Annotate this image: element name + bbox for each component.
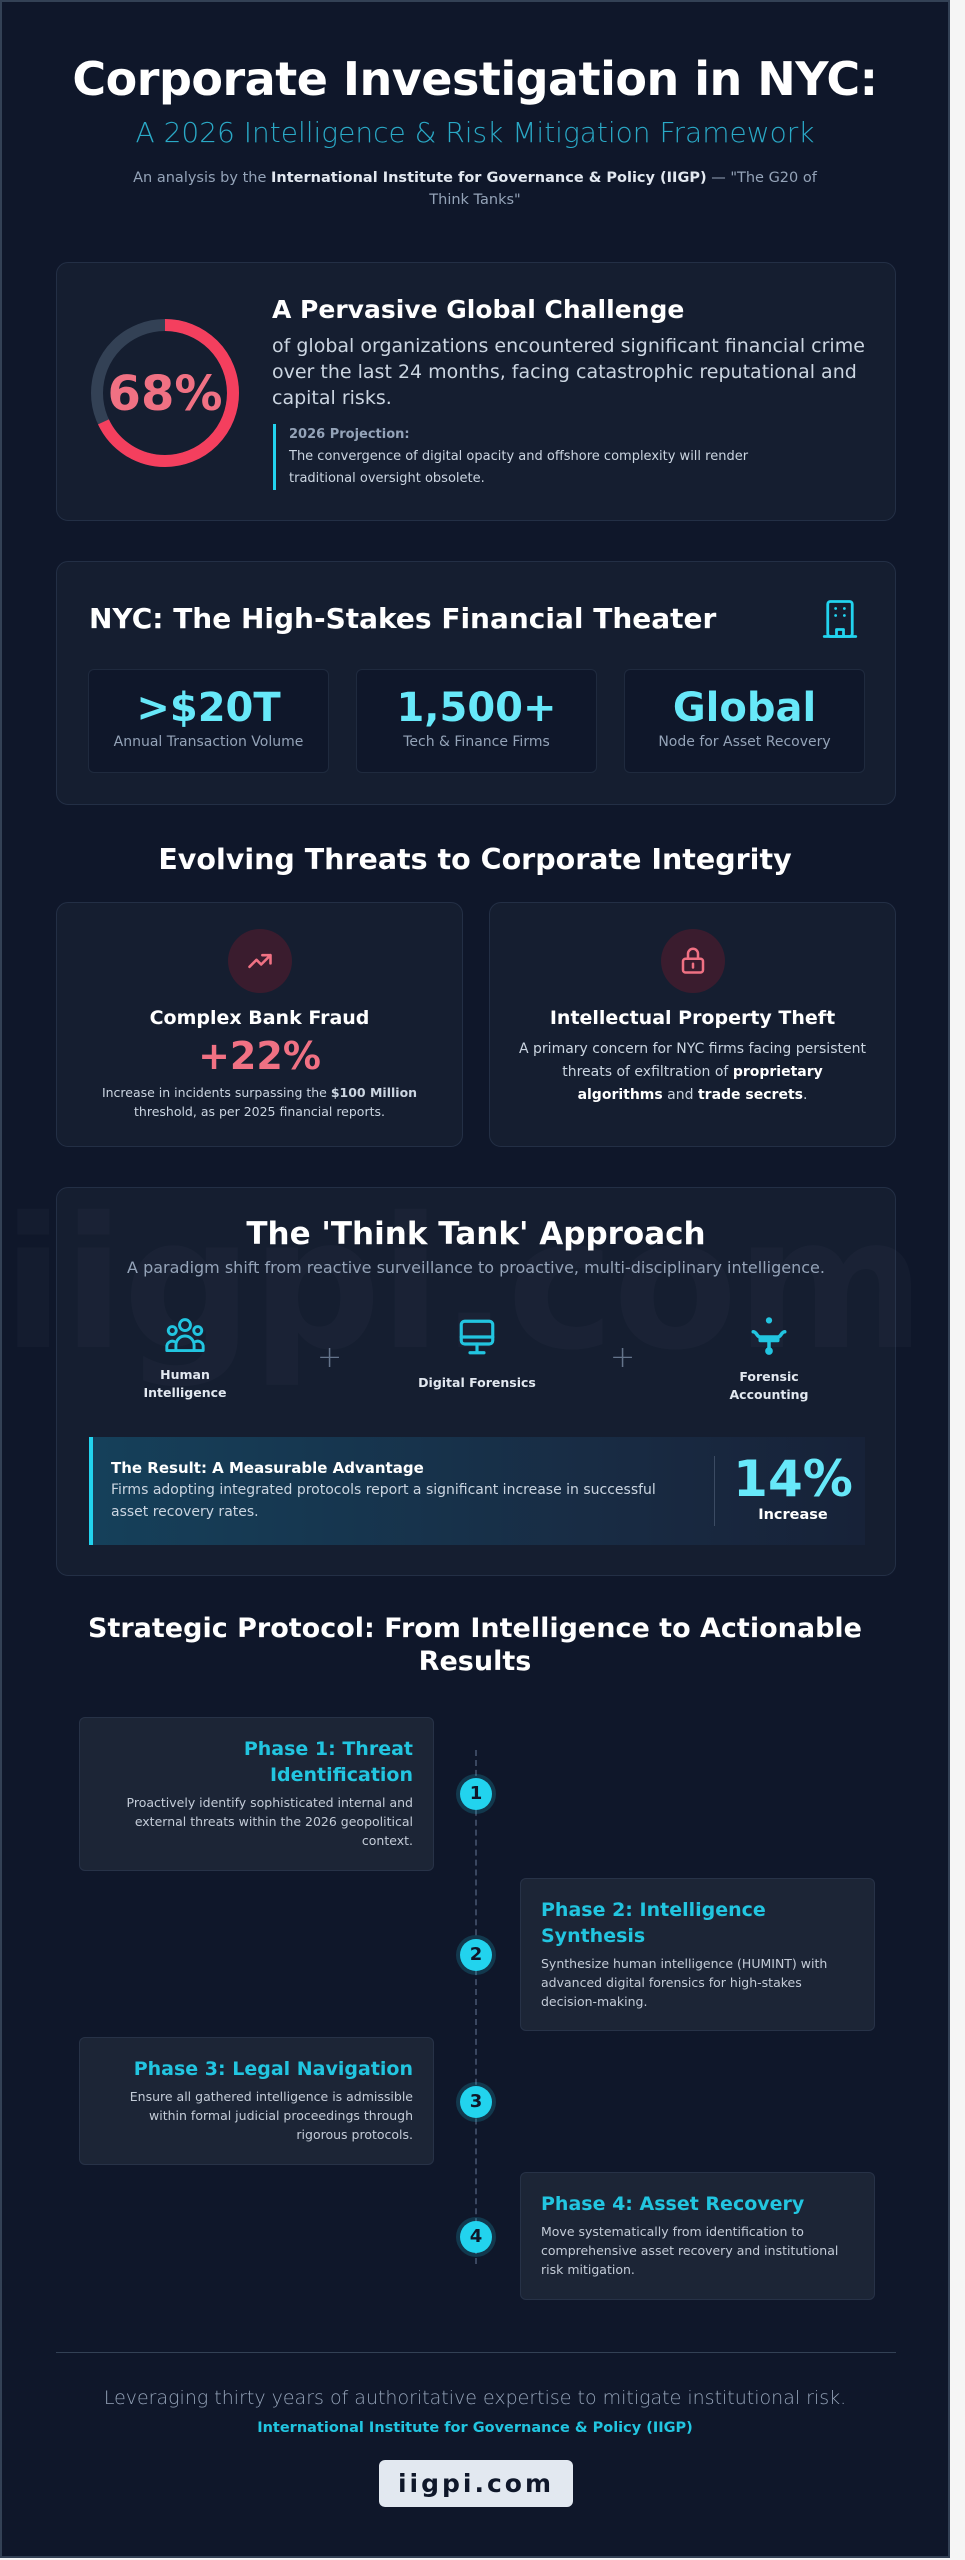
panel: NYC financial theater: [56, 561, 896, 805]
heading: The 'Think Tank' Approach: [246, 1216, 706, 1252]
projection: [273, 424, 803, 490]
button: iigpi.com: [379, 2460, 573, 2507]
stat: transaction: >$20T: [136, 685, 281, 731]
callout: result: Firms adopting integrated protocols report a significant increase in successful asset recovery rates.: [111, 1482, 656, 1520]
subtitle: A paradigm shift from reactive surveillance to proactive, multi-disciplinary intelligence.: [127, 1258, 825, 1277]
stat: global: Node for Asset Recovery: [658, 734, 831, 750]
stat 14%: 14%: [733, 1450, 853, 1508]
pillar: digital forensics: [418, 1320, 536, 1390]
pillar: human intelligence: Intelligence: [143, 1385, 227, 1400]
donut chart 68%: [91, 319, 239, 467]
pillar: human intelligence: [143, 1318, 227, 1400]
description: A primary concern for NYC firms facing persistent threats of exfiltration of proprietary: [519, 1041, 866, 1080]
phase 4: Move systematically from identification to comprehensive asset recovery and institutional risk mitigation.: [541, 2224, 838, 2277]
icon: lock: [661, 929, 725, 993]
stat: firms: [356, 669, 597, 773]
phase 4: Phase 4: Asset Recovery: [541, 2193, 804, 2215]
title: Corporate Investigation in NYC:: [72, 52, 878, 106]
marker 4: [460, 2221, 492, 2253]
byline: An analysis by the International Institute for Governance & Policy (IIGP) — "The G20 of Think Tanks": [133, 170, 817, 208]
panel: think tank approach: [56, 1187, 896, 1576]
marker 3: 3: [470, 2091, 482, 2112]
timeline line: [475, 1750, 477, 2264]
marker 4: 4: [470, 2226, 482, 2247]
marker 2: [460, 1939, 492, 1971]
stat: firms: 1,500+: [396, 685, 557, 731]
stat: transaction: [88, 669, 329, 773]
icon: building: [822, 600, 858, 638]
projection: 2026 Projection:: [289, 427, 410, 442]
button: iigpi.com: iigpi.com: [398, 2469, 554, 2498]
panel: IP theft: [489, 902, 896, 1147]
callout: result: The Result: A Measurable Advantage: [111, 1459, 424, 1477]
callout: result: [89, 1437, 865, 1545]
heading: A Pervasive Global Challenge: [272, 295, 684, 324]
stat: firms: Tech & Finance Firms: [403, 734, 550, 750]
phase 1: Proactively identify sophisticated internal and external threats within the 2026 geopolitical context.: [127, 1795, 413, 1848]
body text: of global organizations encountered significant financial crime over the last 24 months, facing catastrophic reputational and capital risks.: [272, 335, 865, 409]
phase 1: Phase 1: Threat Identification: [244, 1738, 413, 1786]
phase 3: Ensure all gathered intelligence is admissible within formal judicial proceedings through rigorous protocols.: [130, 2089, 413, 2142]
panel: global challenge: [56, 262, 896, 521]
title: Intellectual Property Theft: [550, 1007, 835, 1029]
stat: global: [624, 669, 865, 773]
projection: The convergence of digital opacity and offshore complexity will render traditional oversight obsolete.: [289, 449, 748, 486]
plus: +: [610, 1340, 635, 1375]
phase 2: Phase 2: Intelligence Synthesis: [541, 1899, 766, 1947]
marker 1: [460, 1778, 492, 1810]
pillar: human intelligence: Human: [160, 1367, 210, 1382]
watermark: iigpi.com: [2, 1178, 923, 1390]
phase 2: Synthesize human intelligence (HUMINT) with advanced digital forensics for high-stakes decision-making.: [541, 1956, 827, 2009]
footer tagline: Leveraging thirty years of authoritative expertise to mitigate institutional risk.: [104, 2387, 846, 2409]
phase 3: Phase 3: Legal Navigation: [134, 2058, 413, 2080]
heading: evolving threats: Evolving Threats to Corporate Integrity: [158, 843, 792, 876]
description: Increase in incidents surpassing the $100 Million threshold, as per 2025 financial reports.: [102, 1085, 417, 1119]
pillar: forensic accounting: Forensic: [739, 1369, 799, 1384]
marker 2: 2: [470, 1944, 482, 1965]
panel: bank fraud: [56, 902, 463, 1147]
phase 3: [79, 2037, 434, 2165]
pillar: digital forensics: Digital Forensics: [418, 1375, 536, 1390]
title: Complex Bank Fraud: [150, 1007, 369, 1029]
phase 4: [520, 2172, 875, 2300]
stat: global: Global: [673, 685, 816, 731]
phase 2: [520, 1878, 875, 2031]
donut chart 68%: 68%: [108, 366, 222, 422]
heading: NYC: The High-Stakes Financial Theater: [89, 602, 716, 635]
marker 3: [460, 2086, 492, 2118]
footer org: International Institute for Governance & Policy (IIGP): [257, 2420, 693, 2436]
pillar: forensic accounting: Accounting: [730, 1387, 808, 1402]
pillar: forensic accounting: [730, 1317, 808, 1402]
heading: strategic protocol: Strategic Protocol: From Intelligence to Actionable Results: [88, 1613, 862, 1677]
stat +22%: +22%: [198, 1034, 321, 1078]
plus: +: [317, 1340, 342, 1375]
marker 1: 1: [470, 1783, 482, 1804]
description: [519, 1041, 866, 1103]
subtitle: A 2026 Intelligence & Risk Mitigation Framework: [136, 116, 814, 149]
icon: trending up: [228, 929, 292, 993]
callout: result: Increase: [758, 1507, 828, 1523]
stat: transaction: Annual Transaction Volume: [114, 734, 303, 750]
phase 1: [79, 1717, 434, 1871]
description: algorithms and trade secrets.: [578, 1087, 807, 1103]
